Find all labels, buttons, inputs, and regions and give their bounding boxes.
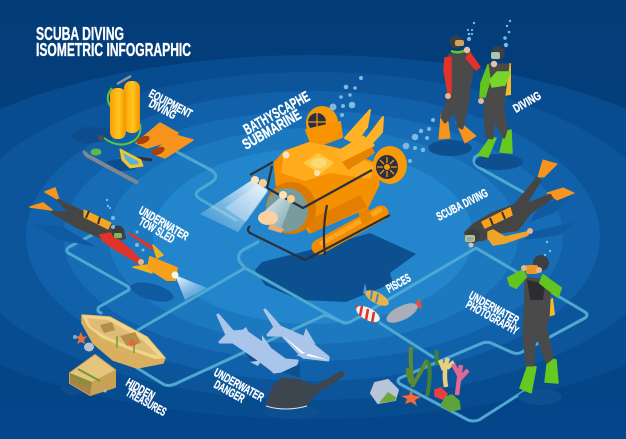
title: SCUBA DIVING <box>36 24 124 44</box>
stingray <box>264 371 344 419</box>
equipment: tanks, fins, mask, snorkel <box>70 76 193 183</box>
label: equipment diving: DIVING <box>147 96 179 122</box>
label: underwater danger <box>212 365 267 406</box>
title: ISOMETRIC INFOGRAPHIC <box>36 40 191 60</box>
bubbles near submarine <box>330 76 435 163</box>
bubbles near tow sled diver <box>106 199 144 252</box>
submarine shadow <box>255 233 416 302</box>
title <box>36 24 191 60</box>
fish group <box>354 283 422 327</box>
label: diving: DIVING <box>510 88 543 116</box>
label: underwater danger: UNDERWATER <box>212 365 267 404</box>
label: hidden treasures: HIDDEN <box>124 375 157 403</box>
label: pisces: PISCES <box>384 271 413 296</box>
label: underwater tow sled: TOW SLED <box>136 214 177 246</box>
scuba diver swimming <box>465 160 575 248</box>
connector lines <box>67 152 587 421</box>
label: underwater photography <box>464 288 522 338</box>
sunken boat <box>82 315 165 368</box>
bubbles above photographer <box>544 241 551 256</box>
label: equipment diving <box>147 86 195 122</box>
label: bathyscaphe submarine: SUBMARINE <box>240 106 304 153</box>
treasure chest <box>60 355 115 396</box>
sharks <box>218 310 328 378</box>
underwater photographer <box>508 255 562 405</box>
diver with tow sled <box>30 188 207 305</box>
label: bathyscaphe submarine: BATHYSCAPHE <box>241 88 313 138</box>
bubbles above divers <box>467 20 511 47</box>
label: underwater tow sled: UNDERWATER <box>136 203 191 243</box>
label: hidden treasures: TREASURES <box>124 385 169 419</box>
label: equipment diving: EQUIPMENT <box>147 86 195 121</box>
label: underwater photography: UNDERWATER <box>467 288 522 327</box>
coral reef group <box>371 347 468 411</box>
bathyscaphe submarine <box>200 106 407 260</box>
diver in green suit <box>475 46 523 170</box>
label: underwater tow sled <box>136 203 191 246</box>
label: underwater photography: PHOTOGRAPHY <box>464 297 521 338</box>
diver in red suit <box>428 36 480 156</box>
starfish and pebble by the boat <box>73 332 94 352</box>
label: scuba diving: SCUBA DIVING <box>434 186 490 224</box>
label: underwater danger: DANGER <box>212 377 247 406</box>
